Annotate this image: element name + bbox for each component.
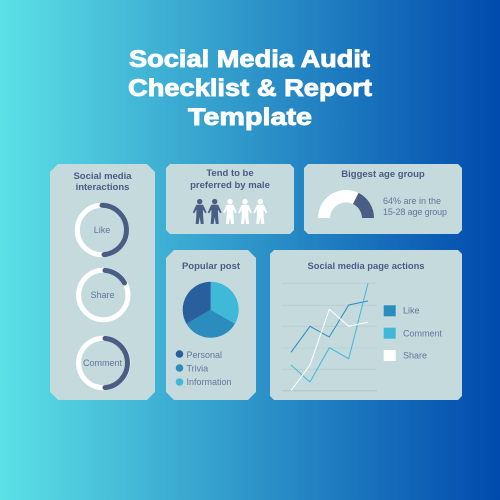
panel: preferred by male xyxy=(166,164,294,234)
ring: comment: Comment xyxy=(83,358,123,368)
panel: social media page actions xyxy=(270,250,462,400)
heading: biggest age group: Biggest age group xyxy=(341,169,425,180)
legend: post types: Personal xyxy=(186,350,222,360)
title: Social Media Audit xyxy=(129,46,370,73)
heading: social media interactions: interactions xyxy=(76,182,129,193)
text: age group note: 64% are in the xyxy=(383,196,441,206)
heading: tend to be preferred by male: preferred by male xyxy=(190,180,270,191)
heading: tend to be preferred by male: Tend to be xyxy=(206,168,254,179)
legend: page actions xyxy=(384,305,443,361)
title: Template xyxy=(188,104,312,131)
ring: share xyxy=(79,270,128,320)
title xyxy=(128,46,372,131)
text: age group note: 15-28 age group xyxy=(383,207,447,217)
heading: popular post: Popular post xyxy=(182,261,241,272)
heading: social media page actions: Social media page actions xyxy=(308,261,424,272)
legend: page actions: Like xyxy=(403,306,420,316)
ring: comment xyxy=(79,338,128,388)
line chart xyxy=(282,283,377,391)
panel: popular post xyxy=(166,250,256,400)
ring: share: Share xyxy=(90,290,115,300)
legend: page actions: Comment xyxy=(403,328,443,338)
legend: post types xyxy=(176,350,232,387)
legend: post types: Information xyxy=(186,377,232,387)
heading: social media interactions: Social media xyxy=(73,171,132,182)
title: Checklist & Report xyxy=(128,75,372,102)
panel: social media interactions xyxy=(50,164,155,400)
gauge chart xyxy=(318,190,374,218)
ring: like xyxy=(77,205,127,255)
icon: five people xyxy=(193,199,267,224)
legend: post types: Trivia xyxy=(186,364,208,374)
ring: like: Like xyxy=(94,225,110,235)
panel: biggest age group xyxy=(304,164,462,234)
pie chart xyxy=(183,282,239,338)
legend: page actions: Share xyxy=(403,350,427,360)
